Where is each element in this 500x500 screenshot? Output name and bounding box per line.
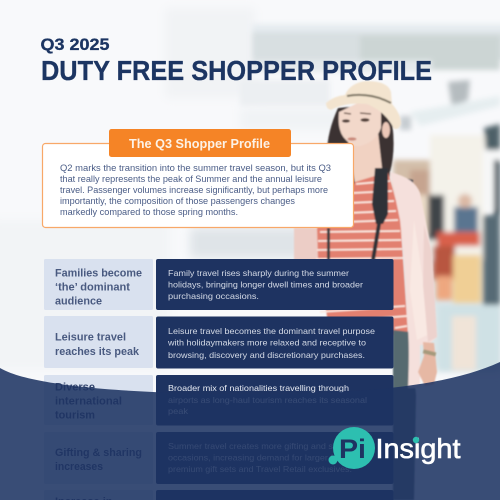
- logo speech bubble: [328, 427, 375, 469]
- row 4: gifting: Summer travel creates more gifting and sharing: [168, 441, 358, 451]
- panel: Q3 shopper profile intro: [42, 129, 354, 228]
- photo: woman with hat: [294, 81, 437, 500]
- logo Pi: Pi: [339, 434, 366, 464]
- intro paragraph: [60, 163, 331, 217]
- cardigan left: [294, 228, 330, 260]
- hand and bracelet: [418, 342, 437, 386]
- title block: [40, 35, 432, 86]
- cardigan right: [390, 172, 437, 388]
- hair: [327, 104, 394, 200]
- row 2: leisure: Leisure travel: [55, 332, 126, 344]
- row 3: international: Broader mix of nationalities travelling through: [168, 383, 349, 393]
- row 1: families: holidays, bringing longer dwell times and broader: [168, 280, 363, 290]
- row 3: international: [44, 375, 394, 426]
- intro paragraph: Q2 marks the transition into the summer travel season, but its Q3: [60, 163, 331, 173]
- backpack strap: [405, 178, 414, 212]
- ear: [382, 122, 390, 138]
- row 4: gifting: occasions, increasing demand for larger formats,: [168, 452, 363, 462]
- row 4: gifting: increases: [55, 461, 103, 473]
- row 1: families: Families become: [55, 268, 142, 280]
- row 4: gifting: Gifting & sharing: [55, 447, 142, 459]
- row 3: international: international: [55, 396, 122, 408]
- face: [339, 102, 381, 146]
- logo Insight: Insight: [376, 433, 461, 464]
- title: main heading: DUTY FREE SHOPPER PROFILE: [41, 55, 432, 86]
- row 1: families: Family travel rises sharply during the summer: [168, 268, 349, 278]
- row 4: gifting: premium gift sets and Travel Retail exclusives.: [168, 464, 352, 474]
- row 1: families: ‘the’ dominant: [55, 282, 130, 294]
- row 1: families: [44, 259, 394, 310]
- header text: The Q3 Shopper Profile: [129, 137, 270, 151]
- row 3: international: airports as long-haul tourism reaches its seasonal: [168, 395, 367, 405]
- intro paragraph: travel. Passenger volumes increase significantly, but perhaps more: [60, 185, 328, 195]
- row 1: families: audience: [55, 296, 102, 308]
- curved navy overlay: [0, 362, 500, 500]
- row 2: leisure: Leisure travel becomes the dominant travel purpose: [168, 326, 375, 336]
- row 3: international: peak: [168, 406, 189, 416]
- row 5: cropped: [44, 490, 394, 500]
- jeans: [393, 330, 416, 500]
- row 2: leisure: reaches its peak: [55, 346, 140, 358]
- row 2: leisure: [44, 316, 394, 368]
- title: year: Q3 2025: [40, 35, 110, 54]
- neck: [348, 132, 388, 184]
- row 4: gifting: [44, 432, 394, 484]
- orange header: [109, 129, 291, 157]
- intro paragraph: markedly compared to those spring months.: [60, 207, 238, 217]
- hat: [326, 81, 401, 129]
- striped shirt: [317, 172, 408, 335]
- eyes and lips: [342, 113, 371, 123]
- camera strap: [372, 168, 388, 224]
- intro paragraph: importantly, the composition of those passengers changes: [60, 196, 295, 206]
- row 3: international: tourism: [55, 410, 95, 422]
- logo: Pi Insight: [328, 427, 461, 469]
- logo teal dot: [413, 437, 419, 443]
- row 2: leisure: with holidaymakers more relaxed and receptive to: [167, 338, 366, 348]
- row 2: leisure: browsing, discovery and discretionary purchases.: [168, 350, 365, 360]
- row 1: families: purchasing occasions.: [168, 291, 259, 301]
- intro paragraph: that really represents the peak of Summer and the annual leisure: [60, 174, 322, 184]
- row 3: international: Diverse: [55, 382, 95, 394]
